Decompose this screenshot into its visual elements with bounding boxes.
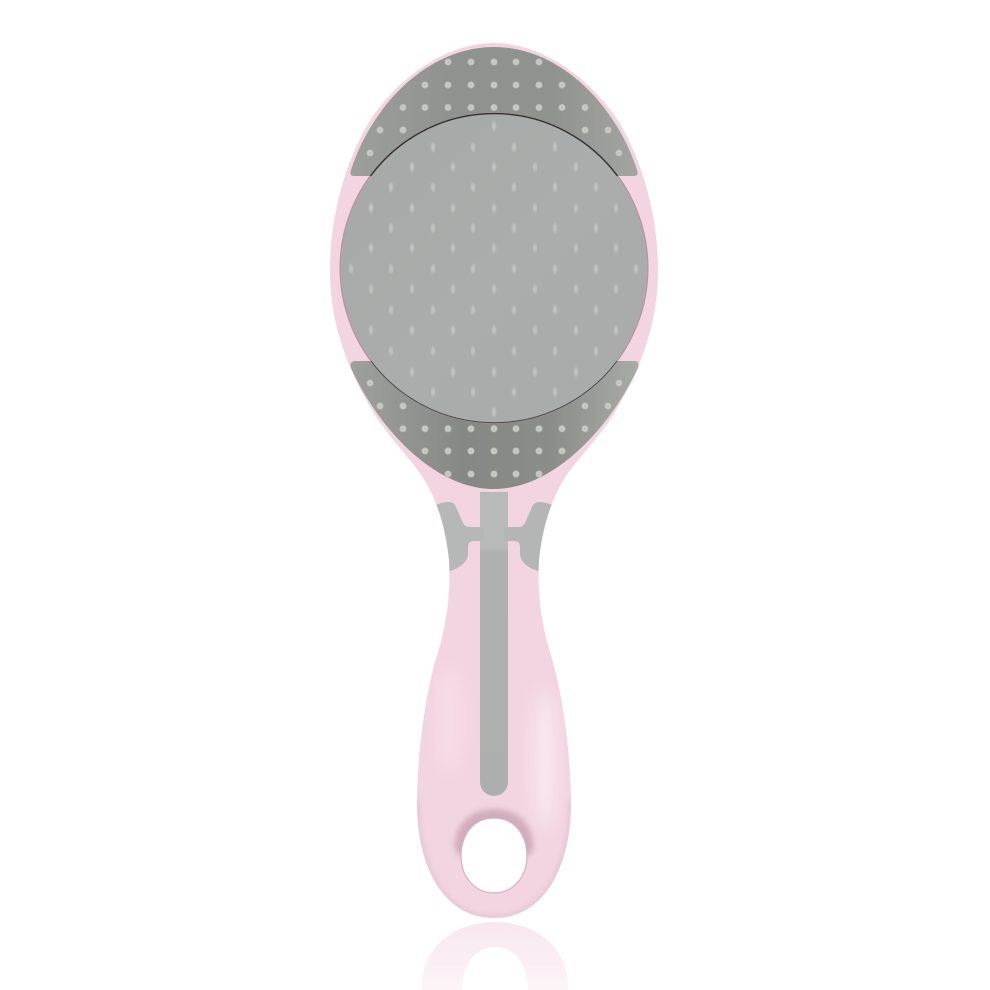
top bristle cap: [350, 47, 638, 176]
bottom bristle cap: [351, 361, 638, 489]
central grey disc with nubs: [340, 113, 648, 423]
hanging hole with shaded rim: [455, 809, 533, 893]
grey neck inlay and handle strip: [436, 492, 552, 796]
illustration: pink hair brush: [330, 43, 658, 990]
brush body outline: [330, 43, 658, 918]
reflection of brush handle: [422, 922, 568, 990]
